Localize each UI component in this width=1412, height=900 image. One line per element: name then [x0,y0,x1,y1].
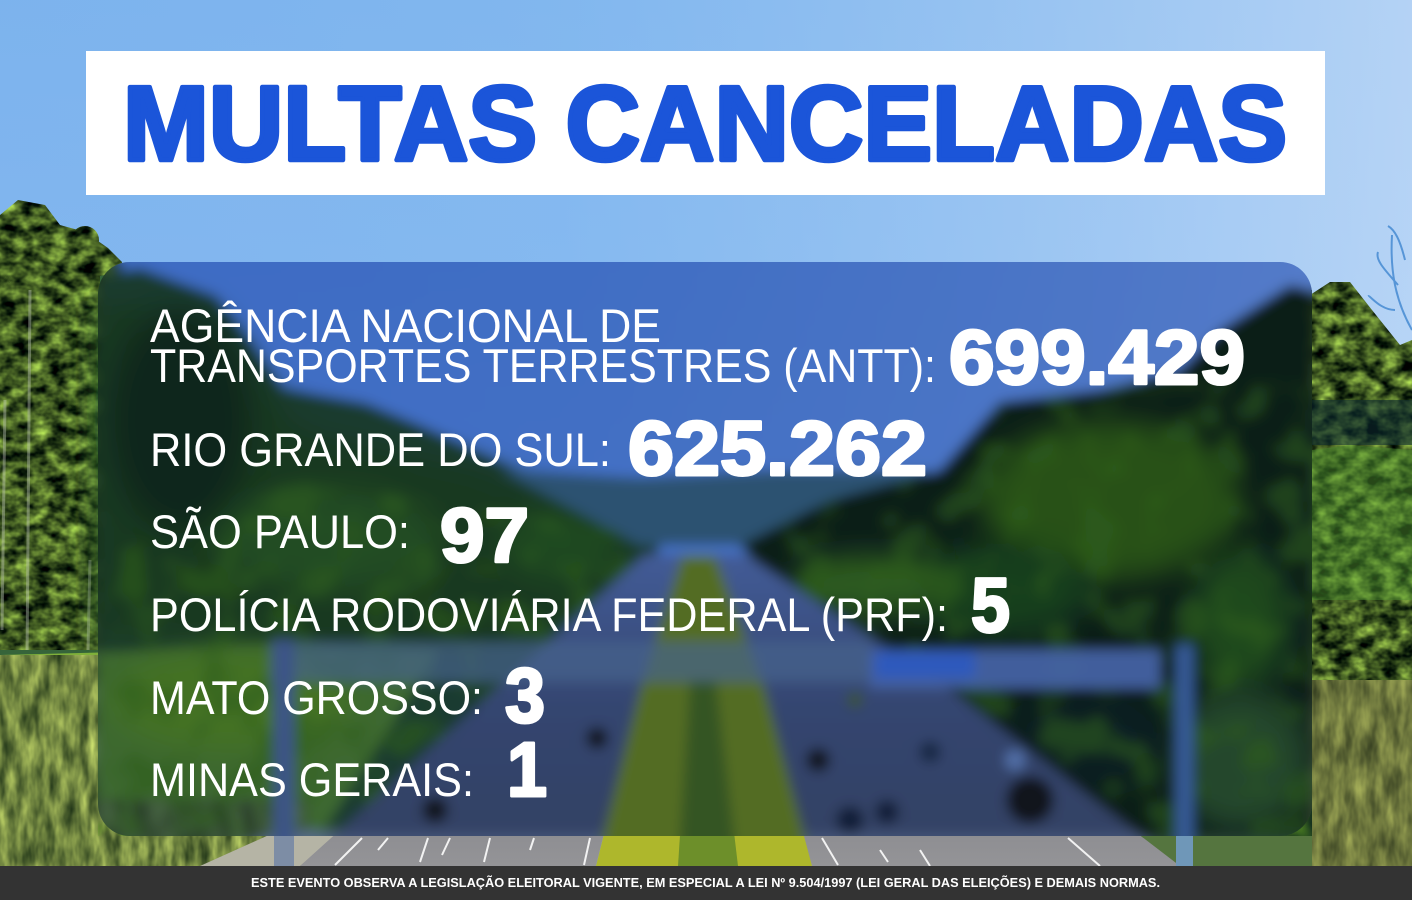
row: São Paulo [150,493,529,579]
row: ANTT: AGÊNCIA NACIONAL DE [150,299,661,352]
translucent blue panel [98,262,1312,836]
road markings [335,838,1100,866]
row: PRF: 5 [971,563,1010,649]
row: Minas Gerais [150,727,547,813]
row: Rio Grande do Sul: 625.262 [628,406,927,492]
row: Minas Gerais: MINAS GERAIS: [150,753,474,806]
row: ANTT: TRANSPORTES TERRESTRES (ANTT): [150,339,936,392]
row: São Paulo: 97 [440,493,529,579]
row: Mato Grosso: MATO GROSSO: [150,671,483,724]
row: São Paulo: SÃO PAULO: [150,505,410,558]
row: PRF [150,563,1010,649]
row: Mato Grosso: 3 [505,653,545,739]
footer bar [0,866,1412,900]
row: PRF: POLÍCIA RODOVIÁRIA FEDERAL (PRF): [150,588,948,641]
row: ANTT [150,299,1245,401]
title: MULTAS CANCELADAS [123,65,1287,183]
row: Rio Grande do Sul: RIO GRANDE DO SUL: [150,423,611,476]
footer disclaimer: ESTE EVENTO OBSERVA A LEGISLAÇÃO ELEITORAL VIGENTE, EM ESPECIAL A LEI Nº 9.504/1997 (LEI GERAL DAS ELEIÇÕES) E DEMAIS NORMAS. [251,875,1160,890]
row: Minas Gerais: 1 [507,727,547,813]
title box [86,51,1325,195]
row: Rio Grande do Sul [150,406,927,492]
row: Mato Grosso [150,653,545,739]
row: ANTT: 699.429 [949,315,1245,401]
